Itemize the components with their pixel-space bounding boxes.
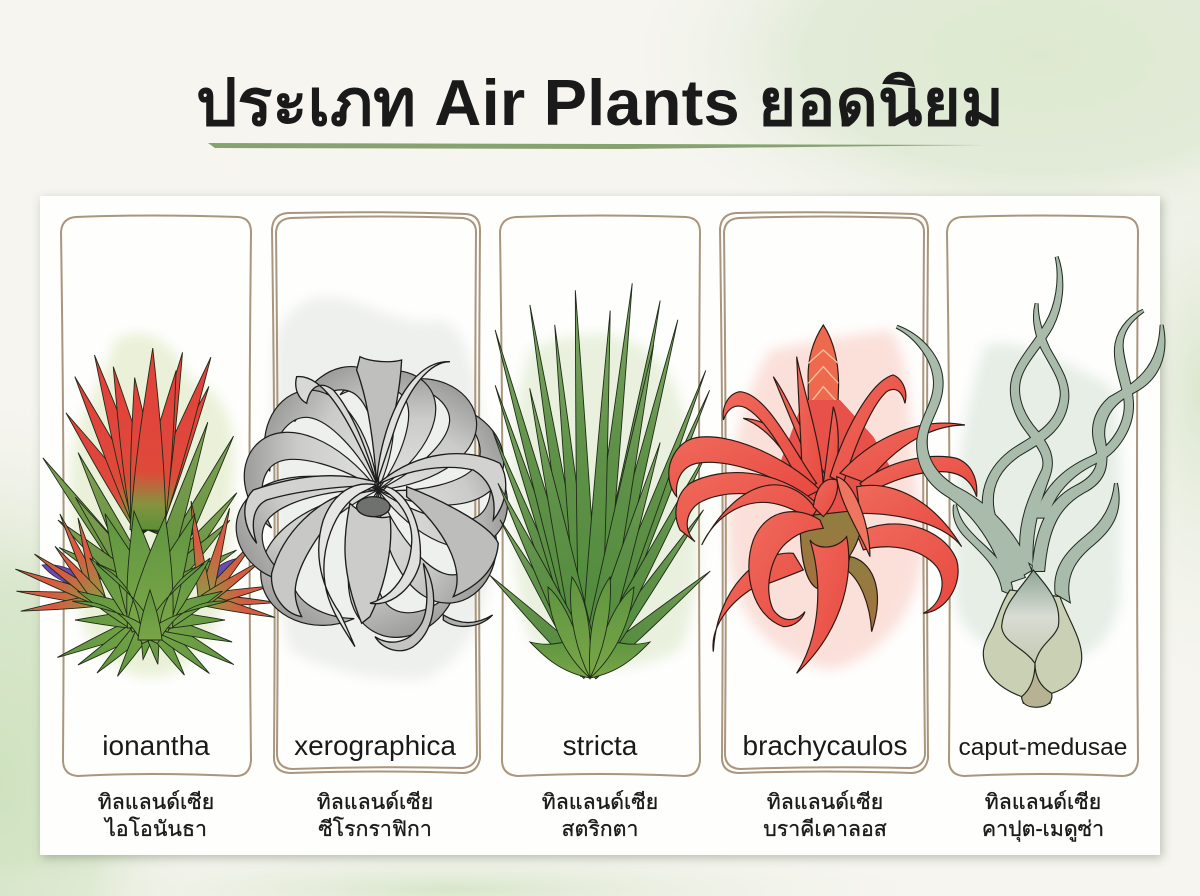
thai name: ionantha: ทิลแลนด์เซีย (98, 790, 214, 814)
frame: ionantha (61, 216, 251, 776)
bulb outer (983, 590, 1082, 703)
label: brachycaulos: brachycaulos (743, 730, 907, 761)
watercolor wash: brachycaulos (727, 330, 925, 670)
watercolor wash: ionantha (70, 334, 235, 678)
label: xerographica (294, 730, 456, 841)
short broad base leaves (530, 577, 650, 678)
flower spike (808, 325, 839, 477)
plant: caput-medusae (897, 257, 1163, 707)
thai name: caput-medusae: คาปุต-เมดูซ่า (982, 817, 1104, 842)
dense red center filler (780, 400, 890, 517)
label: xerographica: xerographica (294, 730, 456, 761)
frame: xerographica (272, 212, 480, 773)
rear narrow leaves (743, 357, 868, 493)
front silver leaves in zoomed coordinates (245, 357, 506, 651)
tall thin blades (484, 282, 717, 679)
watercolor wash: xerographica (272, 297, 492, 680)
thai name: ionantha: ไอโอนันธา (103, 816, 207, 841)
label: brachycaulos (743, 730, 907, 841)
thai name: stricta: ทิลแลนด์เซีย (542, 790, 658, 814)
hooked leaves (669, 375, 977, 613)
frame: stricta (500, 216, 700, 776)
thai name: brachycaulos: บราคีเคาลอส (763, 817, 887, 841)
frame: caput-medusae (947, 216, 1138, 776)
lower green rosette (54, 507, 238, 680)
bulb inner (1002, 570, 1059, 663)
outer green leaves (34, 419, 245, 609)
watercolor wash: stricta (511, 334, 699, 668)
left side pup with red tips (13, 511, 106, 617)
tentacle fill (897, 257, 1163, 600)
thai name: xerographica: ซีโรกราฟิกา (318, 816, 432, 841)
purple flower left (42, 565, 85, 586)
thai name: xerographica: ทิลแลนด์เซีย (317, 790, 433, 814)
plant: xerographica (220, 351, 519, 651)
purple flower right (208, 558, 240, 582)
label: caput-medusae: caput-medusae (959, 734, 1127, 761)
label: stricta: stricta (563, 730, 638, 761)
label: caput-medusae (959, 734, 1127, 842)
thai name: brachycaulos: ทิลแลนด์เซีย (767, 790, 883, 814)
card frames (61, 212, 1138, 776)
label: ionantha: ionantha (102, 730, 210, 761)
watercolor wash: caput-medusae (954, 343, 1121, 658)
frame: brachycaulos (720, 212, 928, 773)
olive lower leaves (713, 510, 877, 652)
label: stricta (542, 730, 658, 841)
front leaves (749, 477, 870, 673)
right side pup with red tips (185, 500, 277, 623)
plant: stricta (484, 282, 717, 679)
label: ionantha (98, 730, 214, 841)
white panel (40, 196, 1160, 855)
bulb roots (1022, 663, 1052, 707)
title brush underline (208, 143, 985, 149)
plant: brachycaulos (669, 325, 977, 673)
back ring of curled silver leaves (220, 351, 519, 651)
thai name: stricta: สตริกตา (562, 817, 638, 841)
thai name: caput-medusae: ทิลแลนด์เซีย (985, 790, 1101, 814)
title: ประเภท Air Plants ยอดนิยม (196, 66, 1004, 139)
tentacle outlines (897, 257, 1163, 600)
red crown leaves (57, 348, 223, 537)
plant: ionantha (13, 348, 277, 680)
